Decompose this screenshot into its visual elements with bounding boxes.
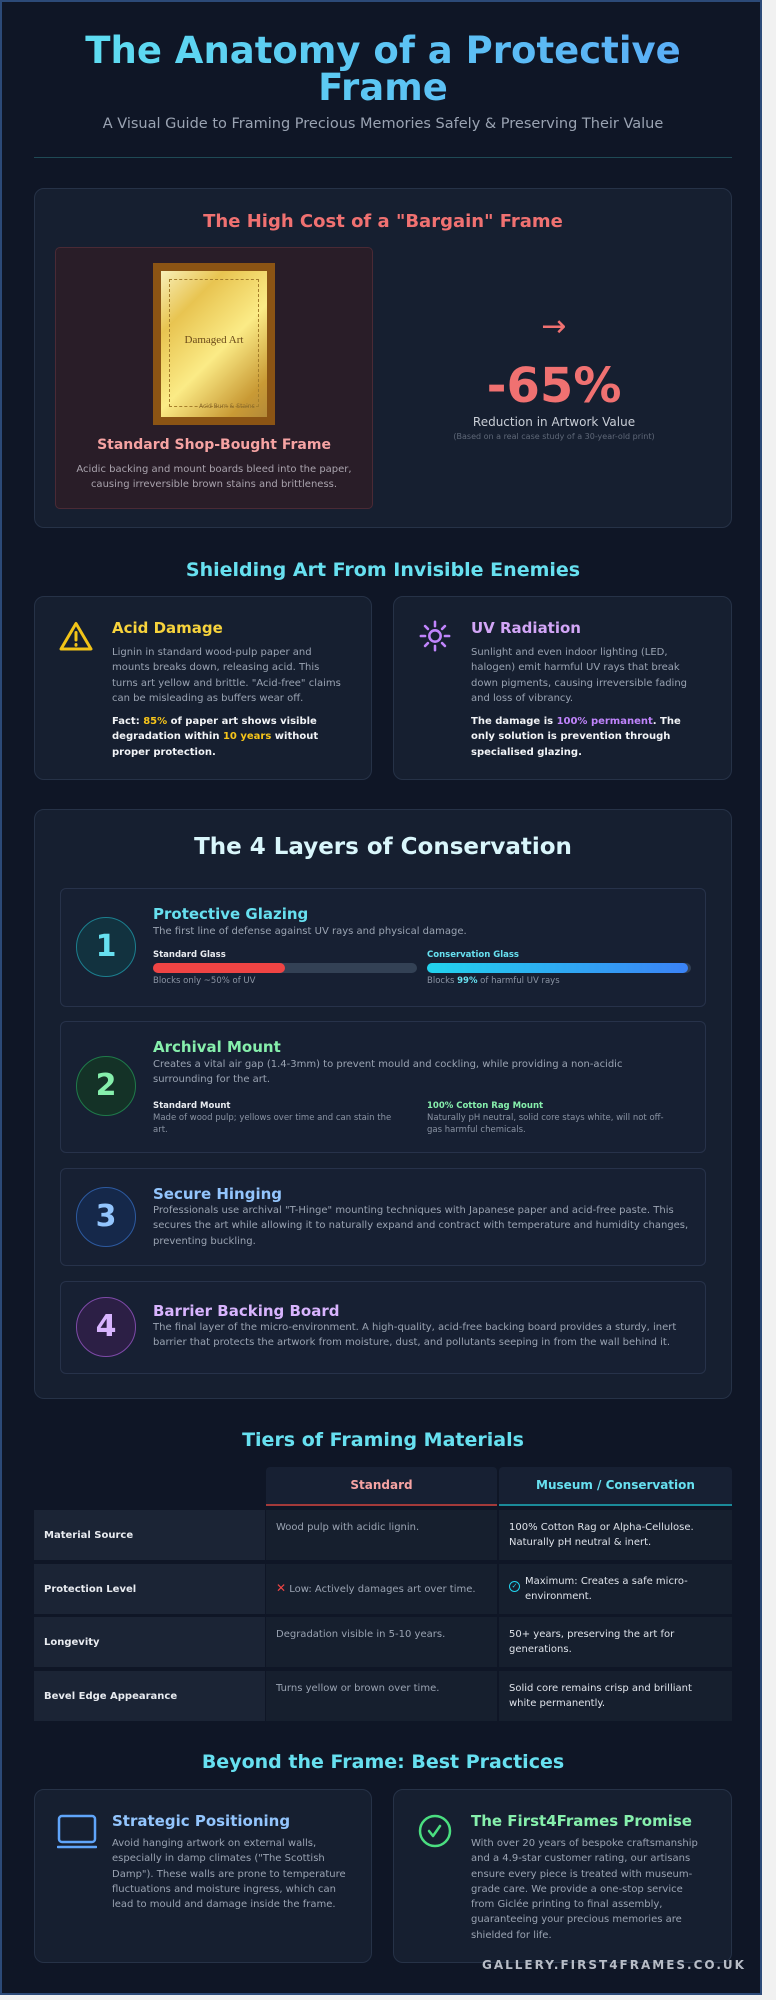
heading: tiers: Tiers of Framing Materials: [242, 1429, 524, 1451]
row: longevity: [34, 1617, 265, 1667]
number 1: [76, 917, 136, 977]
table: materials comparison: Solid core remains crisp and brilliant white permanently.: [509, 1683, 692, 1709]
heading: shielding: Shielding Art From Invisible Enemies: [186, 559, 580, 581]
illustration: damaged frame: [153, 263, 275, 425]
icon: sun: [420, 620, 450, 652]
layer 4: backing: The final layer of the micro-environment. A high-quality, acid-free backing board provides a sturdy, inert barrier that protects the artwork from moisture, dust, and pollutants seeping in from the wall behind it.: [153, 1322, 676, 1348]
card: uv radiation: [393, 596, 732, 780]
number 3: 3: [96, 1199, 116, 1234]
table: materials comparison: Turns yellow or brown over time.: [276, 1683, 439, 1694]
comparison: cotton rag: [427, 1101, 664, 1135]
table: materials comparison: Maximum: Creates a safe micro-environment.: [525, 1576, 688, 1602]
number 4: [76, 1297, 136, 1357]
title: Acid Damage: [112, 619, 223, 637]
subtitle: A Visual Guide to Framing Precious Memories Safely & Preserving Their Value: [103, 116, 663, 132]
row: bevel: [34, 1671, 265, 1721]
card: strategic positioning: [34, 1789, 372, 1963]
icon: check circle: [418, 1814, 452, 1848]
row: material source: Material Source: [44, 1530, 133, 1540]
bar: conservation glass: Conservation Glass: [427, 950, 519, 960]
number 3: [76, 1187, 136, 1247]
number 2: 2: [96, 1068, 116, 1103]
stat: -65%: →: [541, 309, 567, 344]
card: standard shop-bought frame: [55, 247, 373, 509]
table: materials comparison: Wood pulp with acidic lignin.: [276, 1522, 419, 1533]
panel: 4 layers: [34, 809, 732, 1399]
comparison: cotton rag: Naturally pH neutral, solid core stays white, will not off-gas harmful chemicals.: [427, 1113, 664, 1135]
layer 2: mount: Archival Mount: [153, 1038, 281, 1056]
table: materials comparison: ✓: [512, 1582, 517, 1590]
comparison: standard mount: [153, 1101, 391, 1135]
layer 1: glazing: [60, 888, 706, 1007]
comparison: cotton rag: 100% Cotton Rag Mount: [427, 1101, 543, 1111]
heading: beyond the frame: Beyond the Frame: Best Practices: [202, 1751, 564, 1773]
bar: conservation glass: Blocks 99% of harmful UV rays: [427, 976, 560, 986]
heading: The 4 Layers of Conservation: [194, 834, 572, 860]
footer url: GALLERY.FIRST4FRAMES.CO.UK: [482, 1958, 746, 1972]
card: strategic positioning: Avoid hanging artwork on external walls, especially in damp climates ("The Scottish Damp"). These walls are prone to temperature fluctuations and moisture ingress, which can lead to mould and damage inside the frame.: [112, 1838, 346, 1910]
stat: -65%: [453, 309, 655, 441]
title: [2, 32, 764, 106]
card: acid damage: [34, 596, 372, 780]
table: materials comparison: 100% Cotton Rag or Alpha-Cellulose. Naturally pH neutral & inert.: [509, 1522, 694, 1548]
stat: -65%: Reduction in Artwork Value: [473, 415, 635, 429]
title: The Anatomy of a Protective: [85, 29, 681, 72]
table: materials comparison: ✕ Low: Actively damages art over time.: [276, 1581, 476, 1595]
heading: high cost: The High Cost of a "Bargain" Frame: [203, 211, 563, 232]
stat: -65%: -65%: [487, 358, 621, 414]
title: UV Radiation: [471, 619, 581, 637]
title: Frame: [318, 66, 448, 109]
number 4: 4: [96, 1309, 116, 1344]
bar: standard glass: Blocks only ~50% of UV: [153, 976, 255, 986]
title: Protective Glazing: [153, 905, 308, 923]
number 1: 1: [96, 929, 116, 964]
bar: standard glass: Standard Glass: [153, 950, 226, 960]
layer 4: backing: Barrier Backing Board: [153, 1302, 339, 1320]
header: standard: Standard: [350, 1478, 413, 1492]
fact: Fact: 85% of paper art shows visible degradation within 10 years without proper protection.: [112, 716, 318, 758]
table: materials comparison: 50+ years, preserving the art for generations.: [509, 1629, 674, 1655]
comparison: standard mount: Made of wood pulp; yellows over time and can stain the art.: [153, 1113, 391, 1135]
card: strategic positioning: Strategic Positioning: [112, 1812, 290, 1830]
bar: conservation glass: [427, 950, 691, 986]
illustration: damaged frame: Damaged Art: [185, 334, 243, 346]
card: first4frames promise: [393, 1789, 732, 1963]
comparison: standard mount: Standard Mount: [153, 1101, 230, 1111]
number 2: [76, 1056, 136, 1116]
table: materials comparison: Degradation visible in 5-10 years.: [276, 1629, 445, 1640]
row: bevel: Bevel Edge Appearance: [44, 1690, 177, 1702]
header: museum: [499, 1467, 732, 1506]
row: protection: Protection Level: [44, 1584, 136, 1594]
fact: The damage is 100% permanent. The only solution is prevention through specialised glazing.: [471, 716, 681, 758]
layer 4: backing: [60, 1281, 706, 1374]
layer 2: mount: Creates a vital air gap (1.4-3mm) to prevent mould and cockling, while providing a non-acidic surrounding for the art.: [153, 1059, 622, 1085]
label: Standard Shop-Bought Frame: [97, 437, 331, 453]
card: first4frames promise: With over 20 years of bespoke craftsmanship and a 4.9-star customer rating, our artisans ensure every piece is treated with museum-grade care. We provide a one-stop service from Giclée printing to final assembly, guaranteeing your precious memories are shielded for life.: [471, 1838, 698, 1941]
panel: bargain frame cost: [34, 188, 732, 528]
description: Acidic backing and mount boards bleed into the paper, causing irreversible brown stains and brittleness.: [76, 464, 352, 490]
row: protection: [34, 1564, 265, 1614]
layer 3: hinging: [60, 1168, 706, 1266]
row: material source: [34, 1510, 265, 1560]
layer 1: glazing: The first line of defense against UV rays and physical damage.: [153, 926, 467, 937]
layer 2: mount: [60, 1021, 706, 1153]
illustration: damaged frame: Acid Burn & Stains: [199, 403, 255, 410]
header: museum: Museum / Conservation: [536, 1478, 695, 1492]
row: longevity: Longevity: [44, 1636, 100, 1648]
table: materials comparison: [34, 1467, 732, 1721]
stat: -65%: (Based on a real case study of a 30-year-old print): [453, 432, 655, 441]
text: Lignin in standard wood-pulp paper and mounts breaks down, releasing acid. This turns art yellow and brittle. "Acid-free" claims can be misleading as buffers wear off.: [112, 647, 341, 704]
layer 3: hinging: Secure Hinging: [153, 1185, 282, 1203]
header: standard: [266, 1467, 497, 1506]
bar: standard glass: [153, 950, 417, 986]
icon: warning: [60, 622, 93, 650]
text: Sunlight and even indoor lighting (LED, halogen) emit harmful UV rays that break down pigments, causing irreversible fading and loss of vibrancy.: [471, 647, 687, 704]
icon: laptop/frame: [57, 1814, 97, 1848]
layer 3: hinging: Professionals use archival "T-Hinge" mounting techniques with Japanese paper and acid-free paste. This secures the art while allowing it to naturally expand and contract with temperature and humidity changes, preventing buckling.: [153, 1205, 688, 1247]
card: first4frames promise: The First4Frames Promise: [471, 1812, 692, 1830]
